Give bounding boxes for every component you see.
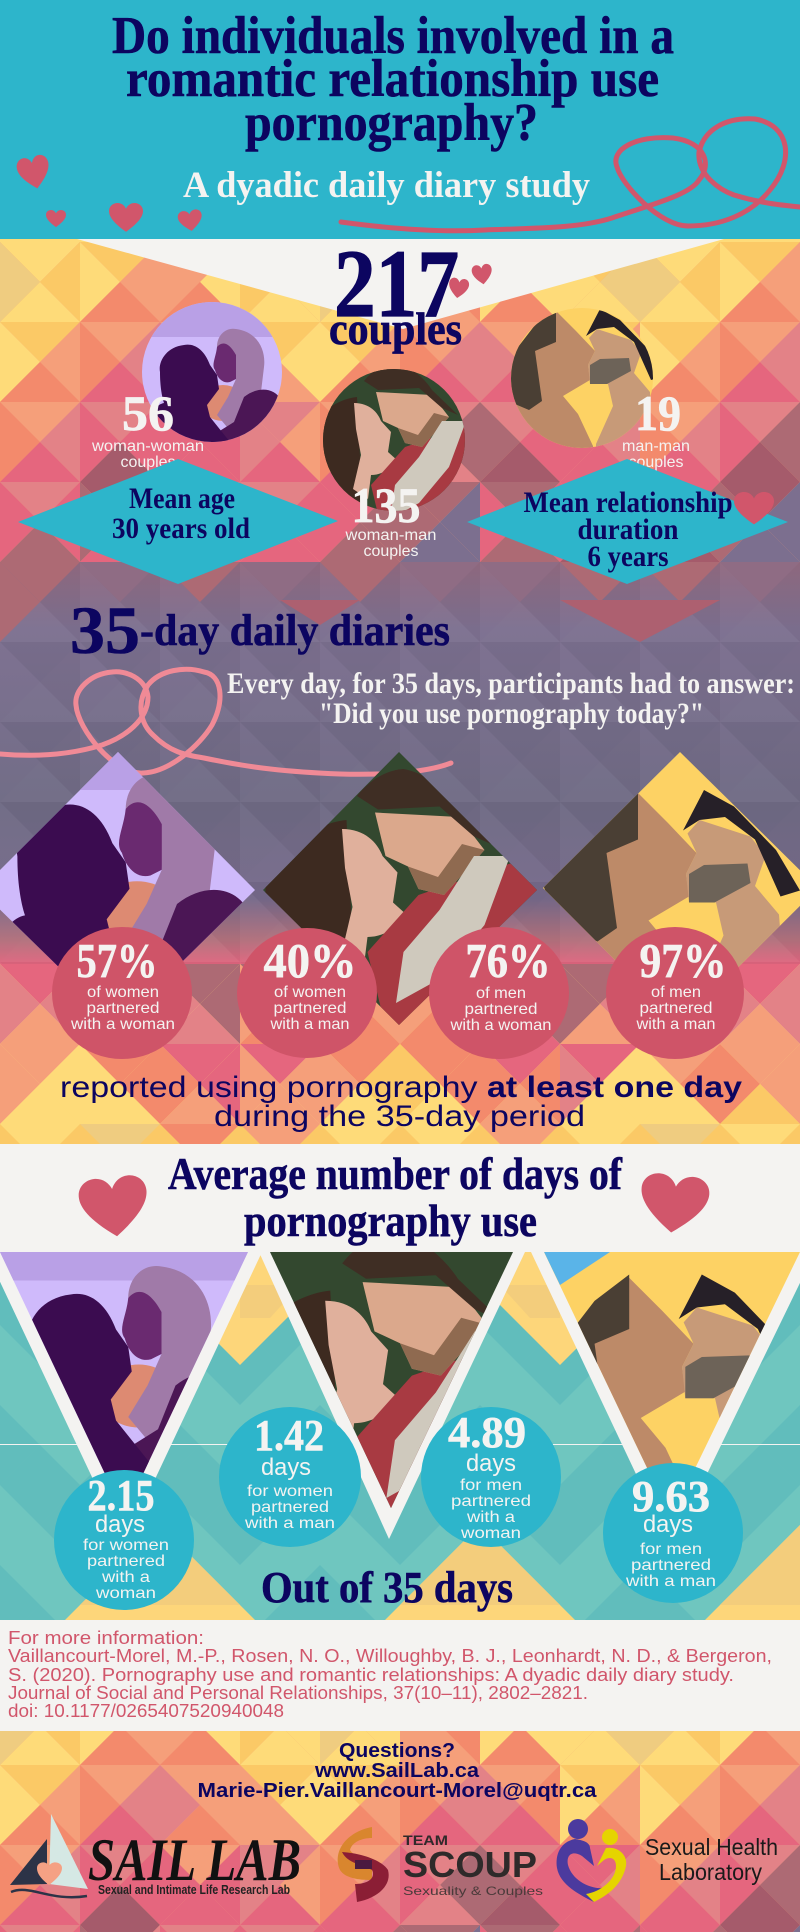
- diamond: mean age: 30 years old: [112, 512, 250, 545]
- stat circle: 4.89 days: 4.89: [448, 1408, 526, 1457]
- logo: Team SCOUP: [338, 1827, 543, 1902]
- diamond: mean relationship duration: duration: [578, 513, 679, 546]
- subtitle: A dyadic daily diary study: [183, 165, 590, 206]
- panel: footer background: [0, 1731, 800, 1932]
- title: romantic relationship use: [126, 50, 659, 108]
- heading: 217 couples: 217: [334, 230, 459, 337]
- logo: SAIL LAB: [10, 1814, 301, 1897]
- diamond: mean age: Mean age: [129, 482, 235, 515]
- diamond: mean relationship duration: 6 years: [588, 540, 668, 573]
- stat circle: 76%: with a woman: [449, 1017, 552, 1034]
- title: [112, 7, 674, 152]
- text: daily question: "Did you use pornography today?": [319, 697, 704, 730]
- heading: 35-day daily diaries: 35: [70, 592, 140, 668]
- stat: 19 man-man couples: man-man: [622, 438, 690, 455]
- icon: heart on diamond: [734, 492, 774, 524]
- stat: 56 woman-woman couples: [91, 385, 204, 471]
- text: daily question: [227, 667, 795, 730]
- logo: Sexual Health Laboratory: Laboratory: [659, 1859, 762, 1885]
- stat circle: 76%: of men: [476, 985, 526, 1002]
- stat: 135 woman-man couples: [344, 477, 436, 560]
- stat circle: 2.15 days: with a: [101, 1569, 150, 1586]
- stat circle: 2.15 days: for women: [83, 1537, 169, 1554]
- text: contact questions: [198, 1740, 597, 1802]
- stat: 135 woman-man couples: couples: [364, 543, 418, 560]
- stat circle: 57%: partnered: [86, 1000, 160, 1017]
- stat: 56 woman-woman couples: woman-woman: [91, 438, 204, 455]
- stat circle: 9.63 days: partnered: [631, 1557, 711, 1574]
- text: reported use: during the 35-day period: [214, 1100, 585, 1133]
- heading: out of 35 days: Out of 35 days: [261, 1563, 513, 1612]
- title: Do individuals involved in a: [112, 7, 674, 65]
- pattern rows: bottom of sample panel: [0, 964, 800, 1164]
- logo: Sexual Health Laboratory: Sexual Health: [645, 1834, 778, 1860]
- logo: Sexual Health Laboratory: [557, 1819, 778, 1902]
- stat: 19 man-man couples: couples: [628, 454, 684, 471]
- photo: man-man couple circle: [511, 308, 653, 448]
- photo: women triangle with frame: [0, 1252, 260, 1478]
- heading: average number of days: Average number of days of: [168, 1149, 623, 1199]
- panel: patterned study sample background: [0, 239, 800, 1164]
- logo: Team SCOUP: SCOUP: [403, 1844, 537, 1885]
- photo: women diamond: [0, 752, 255, 966]
- stat circle: 40%: [237, 928, 377, 1058]
- panel: citation: [0, 1620, 800, 1731]
- stat circle: 57%: of women: [87, 984, 159, 1001]
- stat circle: 1.42 days: days: [261, 1454, 311, 1481]
- stat: 19 man-man couples: [622, 385, 690, 471]
- title: pornography?: [245, 94, 538, 152]
- text: reported use: reported using pornography at least one day: [60, 1071, 742, 1104]
- diamond: mean relationship duration: Mean relationship: [524, 486, 732, 519]
- diamond: mean relationship duration: [467, 459, 788, 584]
- heading: 35-day daily diaries: -day daily diaries: [140, 606, 450, 655]
- logo: Team SCOUP: Sexuality & Couples: [403, 1884, 543, 1898]
- stat circle: 2.15 days: woman: [95, 1585, 156, 1602]
- text: contact questions: Marie-Pier.Vaillancourt-Morel@uqtr.ca: [198, 1780, 597, 1802]
- ribbon: top right: [341, 119, 800, 231]
- panel: teal patterned background: [0, 1205, 800, 1620]
- stat: 135 woman-man couples: 135: [352, 477, 420, 533]
- stat circle: 40%: of women: [274, 984, 346, 1001]
- stat circle: 1.42 days: 1.42: [254, 1411, 324, 1460]
- heading: average number of days: [168, 1149, 623, 1246]
- stat circle: 2.15 days: [54, 1470, 194, 1610]
- stat circle: 4.89 days: woman: [460, 1525, 521, 1542]
- stat circle: 40%: with a man: [269, 1016, 350, 1033]
- photo: men diamond: [543, 752, 800, 967]
- stat circle: 97%: with a man: [635, 1016, 716, 1033]
- stat circle: 2.15 days: days: [95, 1511, 145, 1538]
- ribbon: pink loop: [0, 669, 451, 774]
- photo: woman-woman couple circle: [142, 302, 282, 442]
- stat circle: 76%: partnered: [464, 1001, 538, 1018]
- stat circle: 57%: [52, 927, 192, 1059]
- stat circle: 9.63 days: 9.63: [632, 1472, 710, 1521]
- stat circle: 76%: 76%: [466, 933, 550, 988]
- panel: average days heading band: [0, 1144, 800, 1252]
- stat: 56 woman-woman couples: 56: [122, 385, 174, 441]
- icon: two small hearts: [447, 263, 494, 299]
- photo: woman and man diamond: [263, 752, 537, 1025]
- stat circle: 4.89 days: days: [466, 1450, 516, 1477]
- stat circle: 1.42 days: [219, 1407, 361, 1547]
- stat circle: 97%: [606, 927, 744, 1059]
- stat circle: 9.63 days: [603, 1463, 743, 1603]
- stat: 19 man-man couples: 19: [635, 385, 681, 441]
- heading: average number of days: pornography use: [244, 1196, 537, 1246]
- panel: citation: Journal of Social and Personal Relationships, 37(10–11), 2802–2821.: [8, 1683, 588, 1703]
- diamond: mean age: [18, 459, 338, 584]
- stat circle: 76%: [429, 927, 569, 1059]
- stat circle: 4.89 days: partnered: [451, 1493, 531, 1510]
- logo: SAIL LAB: Sexual and Intimate Life Research Lab: [98, 1882, 290, 1897]
- heading: 35-day daily diaries: [70, 592, 450, 668]
- text: contact questions: Questions?: [339, 1740, 455, 1762]
- panel: citation: For more information:: [8, 1628, 204, 1648]
- stat: 56 woman-woman couples: couples: [120, 454, 176, 471]
- stat circle: 2.15 days: 2.15: [88, 1471, 154, 1520]
- stat circle: 4.89 days: with a: [466, 1509, 515, 1526]
- stat circle: 9.63 days: days: [643, 1511, 693, 1538]
- stat circle: 97%: 97%: [640, 933, 726, 988]
- stat circle: 40%: 40%: [264, 933, 356, 988]
- panel: citation: doi: 10.1177/0265407520940048: [8, 1701, 284, 1721]
- panel: citation: S. (2020). Pornography use and romantic relationships: A dyadic daily diary study.: [8, 1665, 734, 1685]
- stat circle: 57%: 57%: [76, 933, 158, 988]
- icon: left heart: [77, 1174, 151, 1240]
- stat circle: 57%: with a woman: [70, 1016, 175, 1033]
- stat circle: 97%: of men: [651, 984, 701, 1001]
- stat circle: 4.89 days: for men: [460, 1477, 522, 1494]
- stat circle: 1.42 days: with a man: [244, 1515, 335, 1532]
- stat circle: 1.42 days: partnered: [251, 1499, 329, 1516]
- panel: citation: Vaillancourt-Morel, M.-P., Rosen, N. O., Willoughby, B. J., Leonhardt, N. D., & Bergeron,: [8, 1646, 772, 1666]
- stat: 135 woman-man couples: woman-man: [344, 527, 436, 544]
- heading: 217 couples: couples: [329, 303, 462, 354]
- stat circle: 40%: partnered: [274, 1000, 346, 1017]
- stat circle: 1.42 days: for women: [247, 1483, 333, 1500]
- logo: SAIL LAB: SAIL LAB: [88, 1827, 301, 1893]
- stat circle: 9.63 days: with a man: [625, 1573, 716, 1590]
- stat circle: 97%: partnered: [640, 1000, 712, 1017]
- photo: men triangle with frame: [531, 1252, 800, 1474]
- stat circle: 2.15 days: partnered: [87, 1553, 165, 1570]
- text: reported use: [60, 1071, 742, 1133]
- panel: header: [0, 0, 800, 239]
- hearts: header: [15, 153, 204, 232]
- stat circle: 9.63 days: for men: [640, 1541, 702, 1558]
- text: contact questions: www.SailLab.ca: [314, 1760, 480, 1782]
- photo: woman and man triangle with frame: [260, 1252, 525, 1539]
- icon: right heart: [637, 1172, 711, 1236]
- photo: woman-man couple circle: [323, 369, 465, 511]
- logo: Team SCOUP: TEAM: [403, 1832, 448, 1848]
- stat circle: 4.89 days: [421, 1407, 561, 1547]
